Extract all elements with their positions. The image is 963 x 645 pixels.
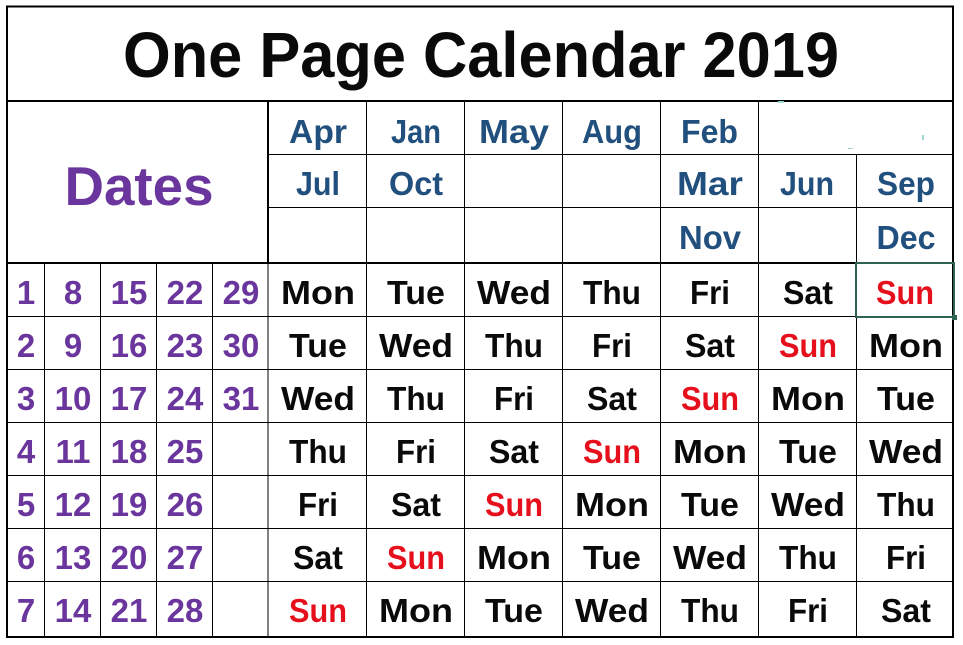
- date row 6: [17, 539, 203, 576]
- month row 2: Sep: [877, 165, 935, 202]
- date row 3: [17, 380, 259, 417]
- weekday row 4: Sun: [583, 433, 641, 470]
- date row 6: 6: [17, 539, 35, 576]
- date row 3: 17: [111, 380, 147, 417]
- weekday row 4: Tue: [779, 433, 837, 470]
- weekday row 5: Sun: [485, 486, 543, 523]
- weekday row 7: [289, 592, 931, 629]
- weekday row 7: Thu: [681, 592, 739, 629]
- date row 5: [17, 486, 203, 523]
- month row 1: Apr: [289, 113, 347, 150]
- weekday row 6: Wed: [673, 539, 747, 576]
- month row 2: Mar: [677, 165, 743, 202]
- date row 2: 30: [223, 327, 259, 364]
- weekday row 3: Fri: [494, 380, 534, 417]
- date row 4: [17, 433, 203, 470]
- date row 2: [17, 327, 259, 364]
- weekday row 5: Thu: [877, 486, 935, 523]
- date row 2: 2: [17, 327, 35, 364]
- month row 1: May: [479, 113, 550, 150]
- weekday row 5: Fri: [298, 486, 338, 523]
- month row 2: [296, 165, 935, 202]
- weekday row 4: Fri: [396, 433, 436, 470]
- month row 2: Jul: [296, 165, 340, 202]
- date row 4: 25: [167, 433, 203, 470]
- month row 1: Aug: [582, 113, 642, 150]
- weekday row 6: Fri: [886, 539, 926, 576]
- month row 3: [679, 219, 936, 256]
- weekday row 2: Wed: [379, 327, 453, 364]
- weekday row 1: Thu: [583, 274, 641, 311]
- date row 2: 23: [167, 327, 203, 364]
- weekday row 2: Sat: [685, 327, 735, 364]
- weekday row 6: Tue: [583, 539, 641, 576]
- month row 1: Jan: [391, 113, 441, 150]
- weekday row 2: Sun: [779, 327, 837, 364]
- weekday row 2: Fri: [592, 327, 632, 364]
- month headers: [289, 113, 936, 256]
- weekday row 6: Thu: [779, 539, 837, 576]
- date row 3: 31: [223, 380, 259, 417]
- date row 3: 3: [17, 380, 35, 417]
- date row 1: 1: [17, 274, 35, 311]
- month row 3: Dec: [876, 219, 936, 256]
- date row 1: 22: [167, 274, 203, 311]
- month row 3: Nov: [679, 219, 742, 256]
- selected cell outline: [856, 263, 957, 320]
- weekday row 6: [293, 539, 926, 576]
- weekday row 7: Wed: [575, 592, 649, 629]
- date row 1: 29: [223, 274, 259, 311]
- date row 5: 19: [111, 486, 147, 523]
- weekday row 5: Mon: [575, 486, 649, 523]
- date row 1: 8: [64, 274, 82, 311]
- month row 2: Oct: [389, 165, 443, 202]
- faint scan specks in blank cell: [778, 101, 924, 149]
- date row 7: 21: [111, 592, 147, 629]
- date row 4: 4: [17, 433, 36, 470]
- month row 1: Feb: [681, 113, 738, 150]
- weekday row 1: Fri: [690, 274, 730, 311]
- weekday row 4: Sat: [489, 433, 539, 470]
- date row 7: 7: [17, 592, 35, 629]
- date row 3: 24: [167, 380, 204, 417]
- weekday row 4: Mon: [673, 433, 747, 470]
- weekday row 3: Wed: [281, 380, 355, 417]
- weekday row 7: Sat: [881, 592, 931, 629]
- weekday row 2: Tue: [289, 327, 347, 364]
- weekday row 1: [281, 274, 934, 311]
- weekday row 1: Wed: [477, 274, 551, 311]
- weekday row 3: Sun: [681, 380, 739, 417]
- weekday row 3: Thu: [387, 380, 445, 417]
- date row 4: 18: [111, 433, 147, 470]
- weekday row 5: Tue: [681, 486, 739, 523]
- date row 2: 16: [111, 327, 147, 364]
- date row 6: 13: [55, 539, 91, 576]
- weekday row 7: Sun: [289, 592, 347, 629]
- month row 2: Jun: [780, 165, 834, 202]
- heading: dates: Dates: [64, 155, 214, 217]
- weekday row 4: [289, 433, 943, 470]
- weekday row 5: Sat: [391, 486, 441, 523]
- month row 1: [289, 113, 738, 150]
- weekday row 1: Sun: [876, 274, 934, 311]
- date row 5: 5: [17, 486, 35, 523]
- weekday row 7: Fri: [788, 592, 828, 629]
- weekday row 2: Mon: [869, 327, 943, 364]
- weekday row 1: Sat: [783, 274, 833, 311]
- title: One Page Calendar 2019: [123, 19, 839, 91]
- weekday row 7: Mon: [379, 592, 453, 629]
- weekday row 7: Tue: [485, 592, 543, 629]
- weekday row 3: Mon: [771, 380, 845, 417]
- date row 6: 20: [111, 539, 147, 576]
- weekday row 6: Sun: [387, 539, 445, 576]
- weekday row 3: Tue: [877, 380, 935, 417]
- date numbers: [17, 274, 259, 629]
- date row 1: 15: [111, 274, 147, 311]
- date row 7: 14: [55, 592, 92, 629]
- weekday row 6: Sat: [293, 539, 343, 576]
- date row 4: 11: [56, 433, 90, 470]
- date row 6: 27: [167, 539, 203, 576]
- date row 2: 9: [64, 327, 82, 364]
- date row 7: [17, 592, 203, 629]
- date row 7: 28: [167, 592, 203, 629]
- date row 5: 12: [55, 486, 91, 523]
- weekday row 3: [281, 380, 935, 417]
- weekday row 3: Sat: [587, 380, 637, 417]
- date row 5: 26: [167, 486, 203, 523]
- weekday row 4: Thu: [289, 433, 347, 470]
- weekday row 5: Wed: [771, 486, 845, 523]
- weekday row 2: [289, 327, 943, 364]
- date row 3: 10: [55, 380, 91, 417]
- weekday row 1: Mon: [281, 274, 355, 311]
- weekday row 1: Tue: [387, 274, 445, 311]
- date row 1: [17, 274, 259, 311]
- weekday row 2: Thu: [485, 327, 543, 364]
- weekday row 6: Mon: [477, 539, 551, 576]
- weekday row 4: Wed: [869, 433, 943, 470]
- weekday table: [281, 274, 943, 629]
- weekday row 5: [298, 486, 935, 523]
